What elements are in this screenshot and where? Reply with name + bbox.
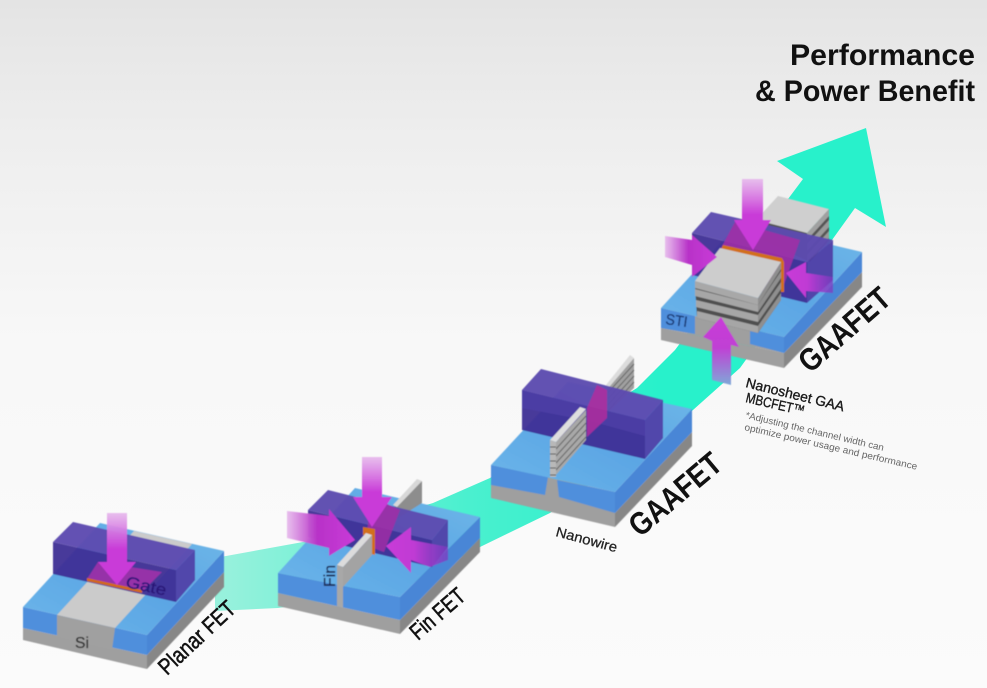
nanowire rear section [602,355,634,416]
fin front section [337,533,372,608]
title: Planar FET: Planar FET [153,595,241,680]
nanosheet upward arrow [703,317,739,385]
fin channel oxide [363,527,375,555]
nanowire base substrate [491,382,692,527]
planar base substrate [23,523,224,669]
planar silicon channel [57,531,192,650]
nanowire front section [550,407,586,477]
label: Fin: Fin [322,565,339,587]
nanosheet left arrow [665,235,717,277]
heading: Performance & Power Benefit: Performance [790,39,975,72]
fin base substrate [278,488,480,634]
nanowire gate block [522,369,663,459]
nanowire channel highlight [587,385,607,437]
device: GAAFET nanosheet MBCFET [661,179,862,385]
label: Nanowire: Nanowire [554,523,619,555]
teal performance trend arrow [215,128,886,611]
note: channel width: optimize power usage and performance [743,422,918,473]
fin rear section [395,481,422,520]
fin left arrow [287,509,355,556]
label: Gate: Gate [124,574,168,599]
planar gate oxide [87,578,142,593]
nanosheet gate block [692,212,833,303]
heading: Performance & Power Benefit [755,39,975,108]
nanosheet rear stack [756,196,829,262]
nanosheet front stack [695,248,781,333]
label: STI: STI [664,311,689,331]
planar gate block [53,522,195,602]
planar downward arrow [98,513,136,585]
caption: Nanosheet GAA MBCFET: Nanosheet GAA [744,374,847,415]
fin downward arrow [353,457,392,527]
device: GAAFET nanowire [491,355,692,527]
title: GAAFET nanowire: GAAFET [621,445,729,543]
device: Fin FET [278,457,480,634]
device: Planar FET [23,513,224,669]
title: Fin FET: Fin FET [404,583,470,645]
nanosheet right arrow [786,262,833,298]
heading: Performance & Power Benefit: & Power Benefit [755,75,975,108]
label: Si: Si [75,635,89,652]
caption: Nanosheet GAA MBCFET: MBCFET™ [744,389,806,418]
nanosheet gate oxide [721,245,784,292]
title: GAAFET nanosheet: GAAFET [791,280,898,379]
nanosheet downward arrow [734,179,771,250]
fin gate block [308,490,448,567]
nanosheet base substrate [661,223,862,368]
note: channel width: *Adjusting the channel width can [744,410,885,454]
fin right arrow [386,527,448,573]
